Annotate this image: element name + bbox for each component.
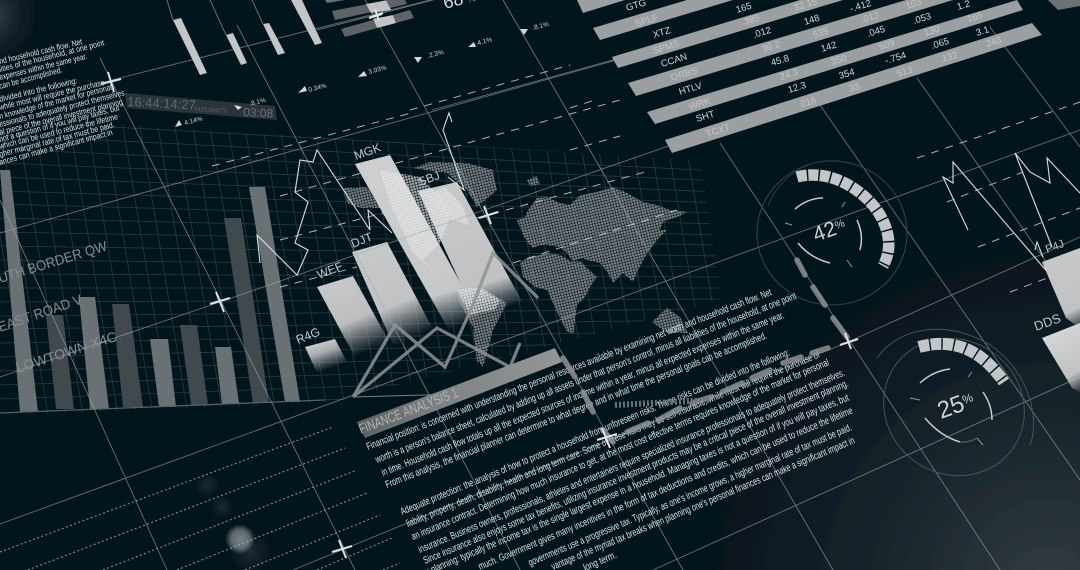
road labels	[0, 237, 119, 376]
timer strip: 0425104275	[194, 107, 228, 115]
finance body text: From this analysis, the financial planner can determine to what degree and in what time the personal goals can be accomplished.	[384, 331, 769, 491]
finance body text: vantage of the myriad tax breaks when planning one's personal finances can make a significant impact in	[550, 436, 857, 570]
gauge: 25%: 25	[934, 390, 968, 425]
small triangle indicators	[298, 21, 550, 94]
table values on light rows: 24.3	[779, 67, 800, 83]
line charts: thin white	[257, 113, 1080, 275]
table values on dark rows: 142	[820, 40, 838, 55]
table values on light rows: 385	[743, 13, 761, 28]
finance body text: liability, property, death, disability, health and long term care. Some of these risks may be self-insurable, while most will require the purchase of	[405, 350, 822, 530]
column labels: WEF	[315, 259, 345, 282]
data table	[577, 0, 1080, 153]
table values on dark rows: HTLV	[678, 80, 704, 98]
bokeh lights	[194, 472, 272, 570]
table values on light rows: 33	[848, 81, 861, 95]
table values on dark rows: .053	[912, 11, 933, 27]
table values on dark rows: .012	[752, 25, 773, 41]
table values on dark rows: SHT	[695, 109, 716, 125]
top-left text block: n knowledge of the market for personal	[0, 82, 113, 121]
top centre bars	[317, 0, 433, 37]
table values on dark rows: 12.3	[787, 80, 808, 96]
table values on dark rows: 45.8	[770, 53, 791, 69]
finance body text: in time. Household cash flow totals up all the expected sources of income within a year, minus all expected expenses within the same year.	[380, 310, 786, 479]
finance body text: much. Government gives many incentives in the form of tax deductions and credits, which can be used to reduce the lifetime	[477, 406, 855, 570]
table values on light rows: ORBS	[670, 65, 699, 84]
small triangle indicators: 3.03%	[368, 64, 388, 76]
right white columns: DDS	[1032, 310, 1063, 334]
timer strip: .8.1%	[249, 97, 267, 108]
bar chart: white columns	[305, 155, 524, 375]
top-left text block: gher marginal rate of tax must be paid.	[0, 119, 116, 159]
top candles	[167, 0, 322, 75]
dotted world map	[343, 162, 688, 367]
top-left text block: can be accomplished.	[0, 64, 63, 91]
table values on light rows: 130	[923, 24, 941, 39]
line chart: thick grey overlay	[353, 253, 538, 397]
table values on dark rows: .065	[930, 36, 951, 52]
table values on light rows: WRK	[688, 96, 713, 113]
gauge: 25%	[857, 311, 1051, 503]
top-left text block: not a question of if you will pay taxes, but	[0, 102, 121, 144]
top-left text block: ances can make a significant impact in	[0, 127, 114, 167]
gauge: 42%: %	[833, 217, 847, 232]
stripe under second paragraph	[615, 400, 710, 405]
bar chart: left columns	[0, 170, 325, 413]
table row bars	[577, 0, 1080, 153]
table values on light rows: SPMS	[652, 38, 681, 57]
table values on light rows: 132	[941, 50, 959, 65]
small triangle indicators: .8.1%	[532, 21, 550, 32]
table values on light rows	[634, 0, 1003, 140]
finance body text: insurance. Business owners, professionals, athletes and entertainers require specialized insurance professionals to adequately protect themselves.	[417, 368, 846, 556]
table values on dark rows: 165	[735, 1, 753, 16]
right white columns: P4J	[1044, 238, 1066, 256]
table values on light rows: 513	[896, 65, 914, 80]
finance body text: governments use a progressive tax. Typically, as one's income grows, a higher marginal rate of tax must be paid.	[527, 422, 854, 569]
timer strip: 03:08	[243, 105, 274, 121]
finance body text	[365, 287, 857, 570]
cross markers	[101, 9, 858, 558]
finance body text: an insurance contract. Determining how much insurance to get, at the most cost effective terms requires knowledge of the market for personal	[410, 357, 831, 543]
dashed guide lines	[212, 65, 1080, 292]
small triangle indicators: .2.3%	[427, 49, 445, 60]
table values on dark rows: CCAN	[660, 51, 689, 70]
top-left text block: al piece of the overall investment planning	[0, 96, 124, 137]
finance body text: Since insurance also enjoys some tax benefits, utilizing insurance investment products may be a critical piece of the overall investment planning.	[422, 378, 850, 567]
table values on light rows: 36.2	[761, 39, 782, 55]
table values on light rows: TCXT	[705, 122, 732, 140]
column labels: R4G	[294, 325, 322, 347]
top-left text block: divided into the following:	[0, 75, 78, 104]
finance heading bar: FINANCE ANALYSIS 1	[356, 384, 460, 437]
table values on light rows: 350	[830, 53, 848, 68]
thick grey dashes	[563, 260, 847, 442]
table values on light rows: 609	[878, 38, 896, 53]
top-left text block: essionals to adequately protect themselves	[0, 87, 125, 129]
finance body text: worth is a person's balance sheet, calculated by adding up all assets under that person's control, minus all liabilities of the household, at one point	[373, 291, 798, 466]
small triangle indicators: 4.1%	[477, 36, 493, 47]
top-left text block	[0, 36, 125, 167]
map dots over white columns	[380, 170, 500, 315]
table values on dark rows: 354	[838, 67, 856, 82]
table values on light rows: 165	[966, 10, 984, 25]
column labels: SBJ	[416, 168, 442, 189]
finance heading bar	[356, 348, 562, 438]
table values on light rows: 248	[985, 35, 1003, 50]
column labels: DJT	[349, 229, 375, 251]
gauge: 42%: 42	[810, 217, 840, 247]
top-left text block: while most will require the purchase	[0, 77, 106, 112]
column labels	[294, 140, 442, 347]
table values on light rows: .018	[797, 95, 818, 111]
perspective grid	[0, 115, 748, 415]
timer strip	[125, 93, 277, 127]
table values on dark rows: XTZ	[652, 25, 672, 41]
top-left text block: expenses within the same year.	[0, 51, 88, 82]
finance body text: Adequate protection: the analysis of how to protect a household from unforeseen risks. These risks can be divided into the following:	[399, 348, 791, 518]
right white columns	[1032, 238, 1080, 392]
timer strip: 16:44:14:27	[127, 94, 196, 113]
table values on dark rows: .045	[866, 24, 887, 40]
table values on dark rows: -.754	[884, 50, 908, 67]
gauge: 42%	[757, 161, 907, 305]
top-left text block: which can be used to reduce the lifetime	[0, 111, 119, 151]
column labels: MGK	[352, 140, 383, 163]
finance body text: Financial position: is concerned with understanding the personal resources available by examining net worth and household cash flow. Net	[365, 287, 773, 453]
table values on light rows: 535	[812, 26, 830, 41]
top-left text block: nd household cash flow. Net	[0, 36, 84, 66]
table values on light rows: .012	[860, 10, 881, 26]
table values on light rows: SPLF	[634, 12, 660, 30]
timer strip: 4.14%	[184, 115, 204, 127]
small triangle indicators: 0.34%	[308, 82, 328, 94]
top-left text block: lities of the household, at one point	[0, 37, 106, 74]
dotted guide lines	[0, 427, 400, 570]
gauge: 25%: %	[960, 390, 975, 407]
table values on dark rows	[625, 0, 991, 125]
table values on dark rows: 3.1	[975, 24, 991, 39]
table values on dark rows: 148	[803, 13, 821, 28]
road labels: LOWTOWN X4C	[14, 328, 119, 376]
